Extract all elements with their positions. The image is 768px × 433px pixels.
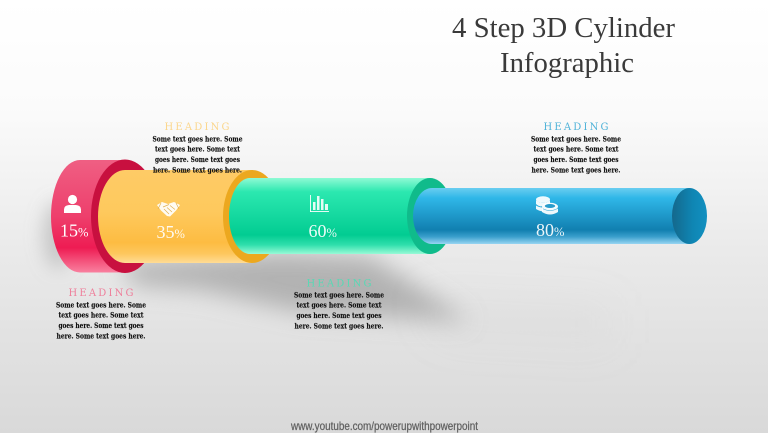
text block: blue heading: HEADING xyxy=(544,122,608,133)
text block: yellow heading: here. Some text goes here. xyxy=(153,166,242,174)
title xyxy=(452,13,676,79)
text block: blue heading xyxy=(531,122,621,174)
value: 80%: 80% xyxy=(536,220,564,240)
text block: green heading: Some text goes here. Some xyxy=(294,290,384,300)
text block: blue heading: goes here. Some text goes xyxy=(534,155,619,164)
text block: green heading: text goes here. Some text xyxy=(296,300,382,310)
title: Infographic xyxy=(500,48,634,79)
icon: person xyxy=(64,195,81,213)
text block: red heading xyxy=(56,288,146,340)
text block: green heading: HEADING xyxy=(306,278,372,290)
blue cylinder end cap xyxy=(672,188,707,244)
icon: bar chart xyxy=(310,195,329,212)
text block: blue heading: Some text goes here. Some xyxy=(531,134,621,144)
text block: yellow heading: Some text goes here. Some xyxy=(152,134,243,144)
cast shadow xyxy=(43,201,610,345)
text block: green heading xyxy=(294,278,384,330)
icon: handshake xyxy=(157,202,180,216)
value: 60%: 60% xyxy=(308,221,337,241)
text block: red heading: HEADING xyxy=(68,288,134,299)
text block: red heading: text goes here. Some text xyxy=(58,310,144,320)
text block: yellow heading xyxy=(152,122,243,174)
text block: yellow heading: text goes here. Some text xyxy=(155,144,241,154)
text block: blue heading: here. Some text goes here. xyxy=(532,166,620,174)
cylinder: green 60% xyxy=(229,178,453,254)
text block: green heading: here. Some text goes here. xyxy=(294,322,384,330)
text block: yellow heading: HEADING xyxy=(164,122,230,133)
text block: blue heading: text goes here. Some text xyxy=(534,144,619,154)
icon: coins xyxy=(536,196,558,214)
cylinder: yellow 35% xyxy=(98,170,281,263)
text block: red heading: goes here. Some text goes xyxy=(58,321,144,330)
footer url: www.youtube.com/powerupwithpowerpoint xyxy=(290,419,479,433)
text block: green heading: goes here. Some text goes xyxy=(296,311,382,320)
value: 15%: 15% xyxy=(60,220,88,240)
cylinder: red 15% xyxy=(51,160,159,273)
value: 35%: 35% xyxy=(156,222,185,242)
title: 4 Step 3D Cylinder xyxy=(452,13,676,44)
text block: red heading: Some text goes here. Some xyxy=(56,300,146,310)
cylinder: blue 80% xyxy=(413,188,707,244)
text block: red heading: here. Some text goes here. xyxy=(56,332,146,340)
text block: yellow heading: goes here. Some text goes xyxy=(155,155,240,164)
